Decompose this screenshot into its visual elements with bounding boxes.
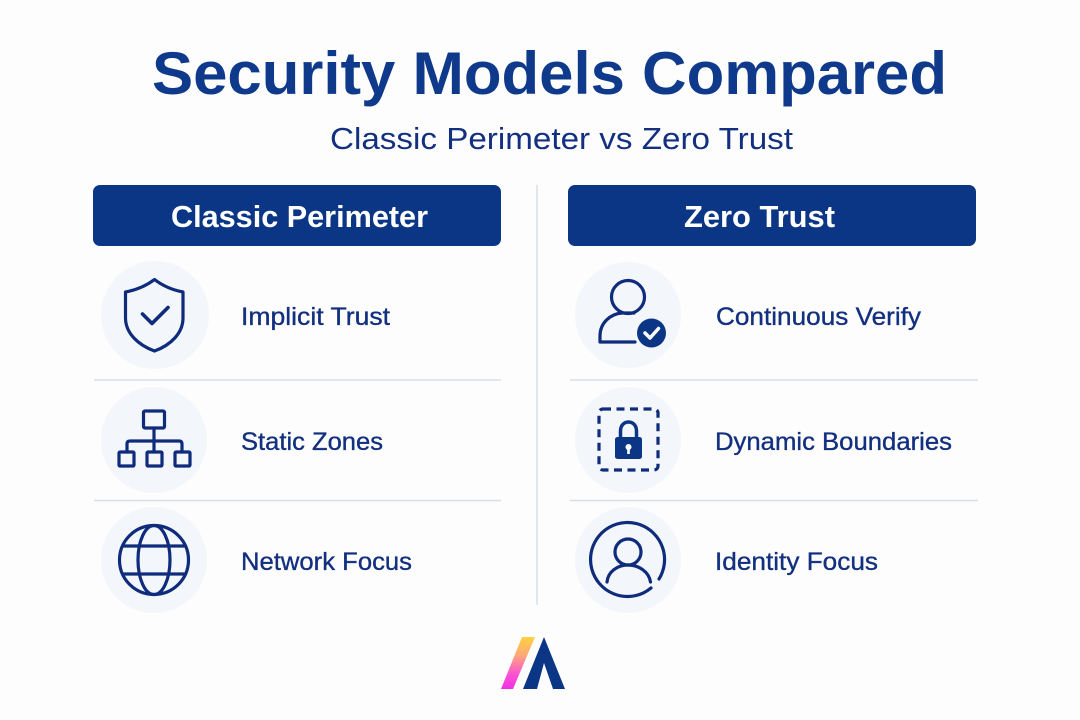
panel: classic perimeter xyxy=(93,185,501,613)
row: dynamic boundaries xyxy=(575,387,952,493)
icon: globe xyxy=(120,526,188,594)
icon: user with check badge xyxy=(600,280,666,348)
row: continuous verify: Continuous Verify xyxy=(716,303,922,331)
row: identity focus xyxy=(575,507,878,613)
header: zero trust: Zero Trust xyxy=(684,199,835,234)
subtitle: Classic Perimeter vs Zero Trust xyxy=(330,121,793,156)
icon: shield with check xyxy=(126,280,183,351)
header: classic perimeter xyxy=(93,185,501,246)
icon: dashed boundary with padlock xyxy=(599,409,658,470)
row: identity focus: Identity Focus xyxy=(715,548,878,576)
row: static zones xyxy=(101,387,383,493)
logo xyxy=(501,637,565,689)
icon: identity circle xyxy=(591,523,665,597)
row: static zones: Static Zones xyxy=(241,428,383,456)
title: Security Models Compared xyxy=(152,40,947,107)
row: network focus xyxy=(101,507,412,613)
row: implicit trust: Implicit Trust xyxy=(241,303,390,331)
row: implicit trust xyxy=(101,261,390,369)
icon: network hierarchy xyxy=(119,411,190,466)
row: continuous verify xyxy=(575,262,922,368)
panel: zero trust xyxy=(568,185,978,613)
header: zero trust xyxy=(568,185,976,246)
header: classic perimeter: Classic Perimeter xyxy=(171,199,428,234)
row: network focus: Network Focus xyxy=(241,548,412,576)
row: dynamic boundaries: Dynamic Boundaries xyxy=(715,428,952,456)
